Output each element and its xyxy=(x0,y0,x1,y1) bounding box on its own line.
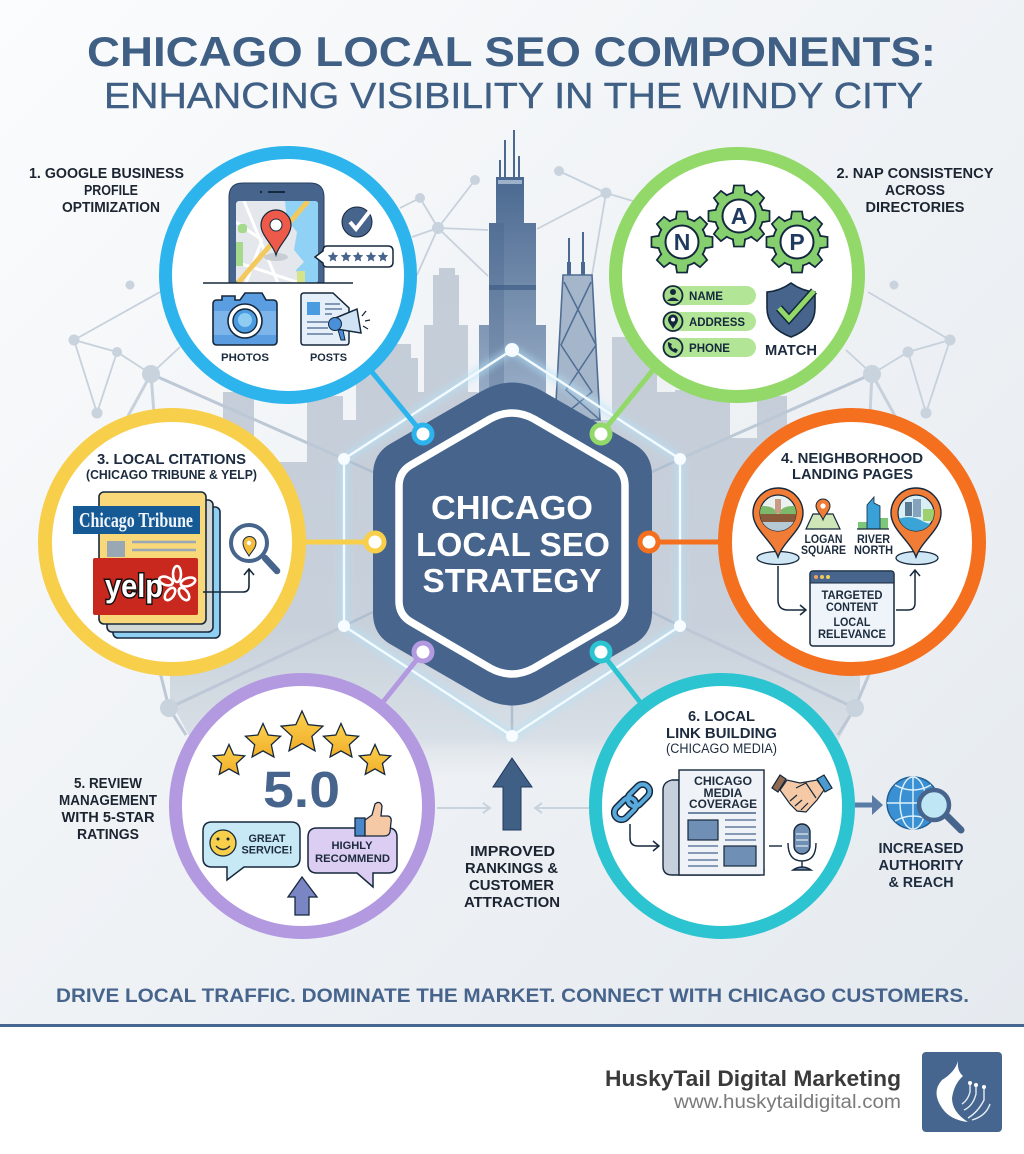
central hexagon text: STRATEGY xyxy=(422,562,602,599)
network nodes background xyxy=(68,166,956,717)
icon: chain link xyxy=(611,781,653,823)
label: 2. NAP Consistency Across Directories: DIRECTORIES xyxy=(866,200,965,216)
icon: newspaper: CHICAGO xyxy=(694,776,752,788)
panel: local citations xyxy=(45,415,299,669)
text: logan square: LOGAN xyxy=(804,534,842,546)
arrow: link to newspaper xyxy=(630,824,659,851)
callout: great service: GREAT xyxy=(248,833,286,845)
icon: camera xyxy=(213,293,277,345)
icon: left pin xyxy=(750,488,806,564)
label: 2. NAP Consistency Across Directories: ACROSS xyxy=(885,183,945,199)
text: improved rankings: ATTRACTION xyxy=(464,895,560,911)
icon: shield match xyxy=(767,283,815,337)
callout: great service: SERVICE! xyxy=(242,844,292,856)
panel: local link building xyxy=(596,680,848,932)
text: improved rankings: IMPROVED xyxy=(470,844,555,860)
glowing hexagon frame xyxy=(338,343,686,742)
label: 1. Google Business Profile Optimization: 1. GOOGLE BUSINESS xyxy=(29,166,184,182)
connector: circle 3 xyxy=(300,533,384,551)
connector: circle 5 xyxy=(383,643,432,702)
icon: review stars bubble xyxy=(315,246,393,267)
icon: gear A: A xyxy=(731,203,747,229)
heading: local link building: (CHICAGO MEDIA) xyxy=(666,741,777,756)
icon: handshake xyxy=(772,775,832,812)
heading: neighborhood landing pages: 4. NEIGHBORHOOD xyxy=(781,450,923,467)
heading: local citations: (CHICAGO TRIBUNE & YELP) xyxy=(86,467,257,482)
slogan: DRIVE LOCAL TRAFFIC. DOMINATE THE MARKET. CONNECT WITH CHICAGO CUSTOMERS. xyxy=(56,986,969,1007)
icon: targeted content window: TARGETED xyxy=(822,590,882,602)
arrows: pin to page to pin xyxy=(778,566,920,615)
label: 2. NAP Consistency Across Directories: 2. NAP CONSISTENCY xyxy=(836,166,994,182)
text: logan square: SQUARE xyxy=(801,545,846,557)
text: improved rankings: RANKINGS & xyxy=(465,861,559,877)
arrow: review up arrow xyxy=(288,877,317,915)
label: 1. Google Business Profile Optimization: OPTIMIZATION xyxy=(62,200,160,216)
central hexagon xyxy=(373,382,652,706)
title: CHICAGO LOCAL SEO COMPONENTS: xyxy=(87,28,936,75)
text: improved rankings xyxy=(464,844,560,911)
icon: right pin xyxy=(891,488,941,564)
connector: circle 1 xyxy=(372,372,432,443)
icon: gear P: P xyxy=(789,229,805,255)
label: 5. Review Management xyxy=(59,776,157,843)
arrow: big up arrow xyxy=(493,758,532,830)
callout: highly recommend: HIGHLY xyxy=(332,840,373,852)
icon: targeted content window xyxy=(810,571,894,646)
central hexagon text xyxy=(416,489,610,599)
arrow: yelp to search xyxy=(203,569,254,592)
text: increased authority & reach: & REACH xyxy=(888,875,954,891)
icon: gear A xyxy=(708,186,770,246)
arrows: faint side arrows xyxy=(437,803,589,813)
title: ENHANCING VISIBILITY IN THE WINDY CITY xyxy=(104,75,923,116)
label: 2. NAP Consistency Across Directories xyxy=(836,166,994,216)
label: 5. Review Management: MANAGEMENT xyxy=(59,793,157,809)
text: river north: NORTH xyxy=(854,545,893,557)
label: 5. Review Management: RATINGS xyxy=(77,827,139,843)
icon: stacked papers xyxy=(99,492,220,638)
connector: circle 4 xyxy=(640,533,724,551)
text: increased authority & reach: AUTHORITY xyxy=(878,858,964,874)
connector: circle 2 xyxy=(592,370,653,443)
text: improved rankings: CUSTOMER xyxy=(469,878,555,894)
label: 5. Review Management: 5. REVIEW xyxy=(74,776,142,792)
logo: chicago tribune: Chicago Tribune xyxy=(79,508,193,532)
text: match: MATCH xyxy=(765,342,817,359)
icon: map with small pin xyxy=(806,499,840,529)
arrow: to increased authority xyxy=(855,795,883,815)
footer xyxy=(0,1024,1024,1154)
icon: targeted content window: CONTENT xyxy=(826,602,878,614)
text: increased authority & reach xyxy=(878,841,964,891)
row: phone xyxy=(664,338,756,357)
footer brand name: HuskyTail Digital Marketing xyxy=(605,1066,901,1091)
icon: newspaper: COVERAGE xyxy=(689,799,757,811)
heading: local citations: 3. LOCAL CITATIONS xyxy=(97,451,246,468)
logo: huskytail xyxy=(922,1052,1002,1132)
logo: yelp xyxy=(93,558,198,615)
text: increased authority & reach: INCREASED xyxy=(878,841,964,857)
hancock tower xyxy=(555,232,600,420)
heading: neighborhood landing pages: LANDING PAGES xyxy=(792,466,913,483)
connector: circle 6 xyxy=(592,643,640,702)
text: logan square xyxy=(801,534,846,557)
row: name: NAME xyxy=(689,291,723,303)
logo: yelp: yelp xyxy=(105,568,163,604)
panel: nap consistency xyxy=(616,154,858,396)
icon: five stars xyxy=(213,711,391,774)
central hexagon text: LOCAL SEO xyxy=(416,526,610,563)
skyline silhouette xyxy=(170,268,860,775)
heading: local link building xyxy=(666,708,777,756)
icon: newspaper: MEDIA xyxy=(704,788,742,800)
heading: local link building: LINK BUILDING xyxy=(666,725,777,742)
icon: thumbs up xyxy=(355,802,391,836)
logo: chicago tribune xyxy=(73,506,200,534)
icon: gear N: N xyxy=(674,229,690,255)
callout: highly recommend xyxy=(308,828,397,887)
callout: great service xyxy=(203,822,300,880)
icon: gear P xyxy=(766,212,828,272)
icon: gear N xyxy=(652,212,712,272)
icon: magnifier with pin xyxy=(231,525,277,571)
text: photos: PHOTOS xyxy=(221,352,269,364)
row: address: ADDRESS xyxy=(689,317,745,329)
callout: highly recommend: RECOMMEND xyxy=(315,853,390,865)
icon: posts document with megaphone xyxy=(301,293,370,345)
panel: neighborhood landing pages xyxy=(725,415,979,669)
icon: building xyxy=(857,497,889,529)
text: river north xyxy=(854,534,893,557)
label: 1. Google Business Profile Optimization: PROFILE xyxy=(84,183,138,199)
icon: map pin xyxy=(261,210,291,255)
row: address xyxy=(664,312,756,331)
label: 5. Review Management: WITH 5-STAR xyxy=(62,810,155,826)
icon: globe with magnifier xyxy=(887,777,961,830)
footer url: www.huskytaildigital.com xyxy=(673,1092,901,1113)
panel: google business profile xyxy=(166,152,410,398)
panel: review management xyxy=(176,680,428,932)
network lines background xyxy=(74,171,950,736)
icon: targeted content window: LOCAL xyxy=(834,617,870,629)
label: 1. Google Business Profile Optimization xyxy=(29,166,184,216)
icon: newspaper xyxy=(663,770,764,875)
title xyxy=(87,28,936,116)
row: name xyxy=(664,286,756,305)
text: 5.0 score: 5.0 xyxy=(263,761,340,818)
icon: phone with map xyxy=(229,183,324,283)
central hexagon text: CHICAGO xyxy=(431,489,593,526)
icon: targeted content window: RELEVANCE xyxy=(818,629,886,641)
text: posts: POSTS xyxy=(310,352,347,364)
text: river north: RIVER xyxy=(857,534,891,546)
icon: microphone xyxy=(769,824,816,870)
heading: local citations xyxy=(86,451,257,482)
heading: local link building: 6. LOCAL xyxy=(688,708,755,725)
icon: verified check xyxy=(342,207,372,237)
willis tower xyxy=(479,130,546,405)
row: phone: PHONE xyxy=(689,343,730,355)
heading: neighborhood landing pages xyxy=(781,450,923,483)
